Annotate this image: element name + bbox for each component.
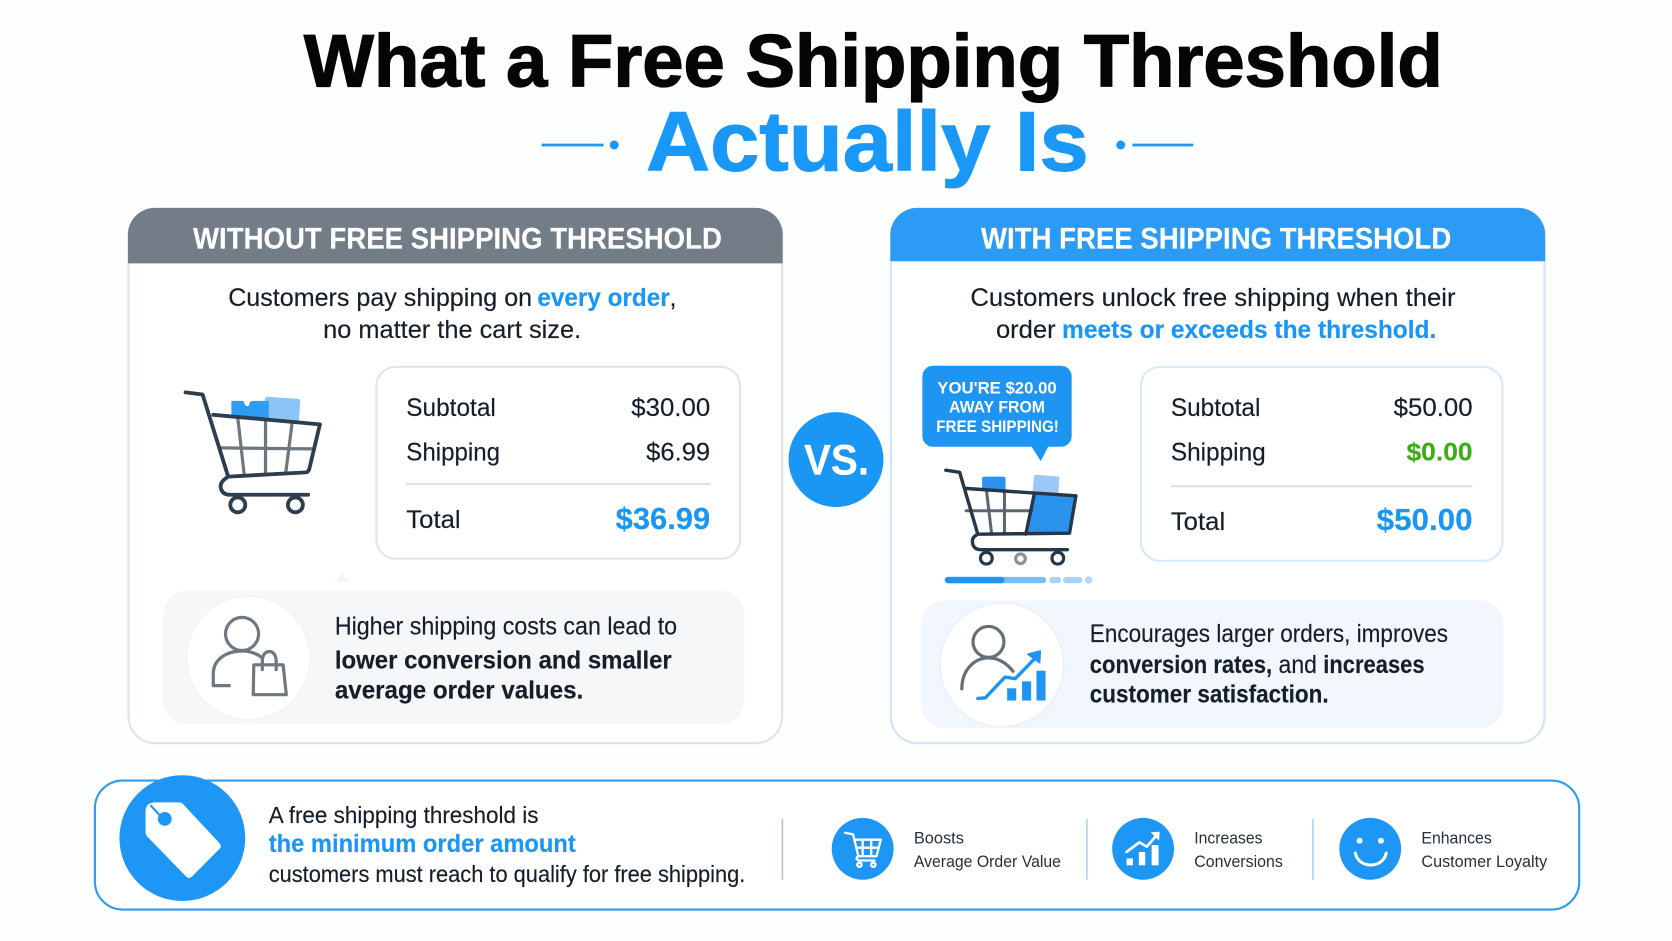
callout: larger orders: customer satisfaction.	[1090, 682, 1329, 709]
callout: larger orders: conversion rates,	[1090, 652, 1272, 679]
benefit: customer loyalty: Customer Loyalty	[1421, 852, 1548, 871]
benefit: increases conversions: Increases	[1194, 828, 1263, 847]
callout: larger orders: Encourages larger orders, improves	[1090, 621, 1448, 648]
vs badge: VS.	[804, 436, 869, 484]
receipt: without threshold: $30.00	[631, 395, 710, 422]
benefit: customer loyalty: Enhances	[1421, 828, 1492, 847]
title	[304, 18, 1443, 189]
callout: lower conversion: lower conversion and smaller	[335, 648, 672, 675]
icon: person with bag	[187, 596, 310, 720]
callout: lower conversion: Higher shipping costs can lead to	[335, 613, 677, 640]
callout: larger orders: increases	[1323, 652, 1425, 679]
callout: lower conversion	[163, 591, 744, 724]
benefit: average order value	[832, 818, 1061, 880]
callout bubble: away from free shipping: AWAY FROM	[949, 398, 1045, 417]
left title flourish	[542, 141, 619, 149]
icon: person with growth chart	[940, 603, 1064, 727]
definition bar	[95, 775, 1579, 910]
definition text: customers must reach to qualify for free shipping.	[269, 861, 745, 887]
receipt: with threshold: $0.00	[1406, 440, 1473, 467]
definition text: A free shipping threshold is	[269, 802, 538, 828]
callout: lower conversion: average order values.	[335, 677, 583, 704]
callout bubble: away from free shipping: YOU'RE $20.00	[937, 378, 1057, 397]
progress bar	[945, 576, 1092, 584]
icon: growth chart	[1112, 818, 1174, 880]
receipt: without threshold: Shipping	[406, 440, 500, 467]
receipt: without threshold	[376, 367, 740, 559]
panel header: with: WITH FREE SHIPPING THRESHOLD	[981, 222, 1451, 255]
icon: full shopping cart	[946, 470, 1076, 564]
receipt: without threshold: Total	[406, 507, 461, 534]
callout: larger orders: and	[1279, 652, 1317, 679]
intro text: with: meets or exceeds the threshold.	[1062, 317, 1436, 344]
receipt: without threshold: $6.99	[646, 440, 710, 467]
intro text: with: Customers unlock free shipping when their	[970, 285, 1456, 312]
vs badge	[789, 412, 883, 507]
benefit: increases conversions	[1112, 818, 1283, 880]
icon: price tag	[119, 775, 245, 901]
panel header: with	[890, 208, 1545, 261]
receipt: with threshold: Shipping	[1171, 440, 1266, 467]
intro text: with: order	[996, 317, 1056, 344]
callout: larger orders	[921, 600, 1504, 728]
title line 1: What a Free Shipping Threshold	[304, 18, 1443, 102]
callout bubble: away from free shipping	[922, 366, 1072, 461]
definition text: the minimum order amount	[269, 831, 576, 858]
intro text: without: ,	[670, 285, 676, 312]
benefit: average order value: Boosts	[914, 828, 964, 847]
panel: with free shipping threshold	[890, 208, 1545, 743]
receipt: without threshold: Subtotal	[406, 395, 496, 422]
panel: without free shipping threshold	[128, 208, 783, 743]
benefit: increases conversions: Conversions	[1194, 852, 1283, 871]
panel header: without	[128, 208, 783, 263]
icon: cart	[832, 818, 894, 880]
benefit: customer loyalty	[1339, 818, 1548, 880]
intro text: without: every order	[537, 285, 670, 312]
receipt: with threshold: Total	[1171, 509, 1225, 536]
callout bubble: away from free shipping: FREE SHIPPING!	[936, 417, 1059, 436]
icon: shopping cart	[186, 392, 320, 512]
panel header: without: WITHOUT FREE SHIPPING THRESHOLD	[193, 222, 722, 255]
intro text: with	[970, 285, 1456, 344]
intro text: without	[228, 285, 676, 344]
receipt: with threshold	[1141, 367, 1502, 561]
icon: smiley	[1339, 818, 1401, 880]
receipt: with threshold: $50.00	[1394, 395, 1473, 422]
right title flourish	[1116, 141, 1193, 149]
intro text: without: Customers pay shipping on	[228, 285, 532, 312]
title line 2: Actually Is	[646, 95, 1089, 189]
benefit: average order value: Average Order Value	[914, 852, 1061, 871]
receipt: without threshold: $36.99	[616, 501, 710, 536]
receipt: with threshold: Subtotal	[1171, 395, 1260, 422]
intro text: without: no matter the cart size.	[323, 317, 581, 344]
receipt: with threshold: $50.00	[1377, 502, 1473, 537]
definition text	[269, 802, 745, 887]
